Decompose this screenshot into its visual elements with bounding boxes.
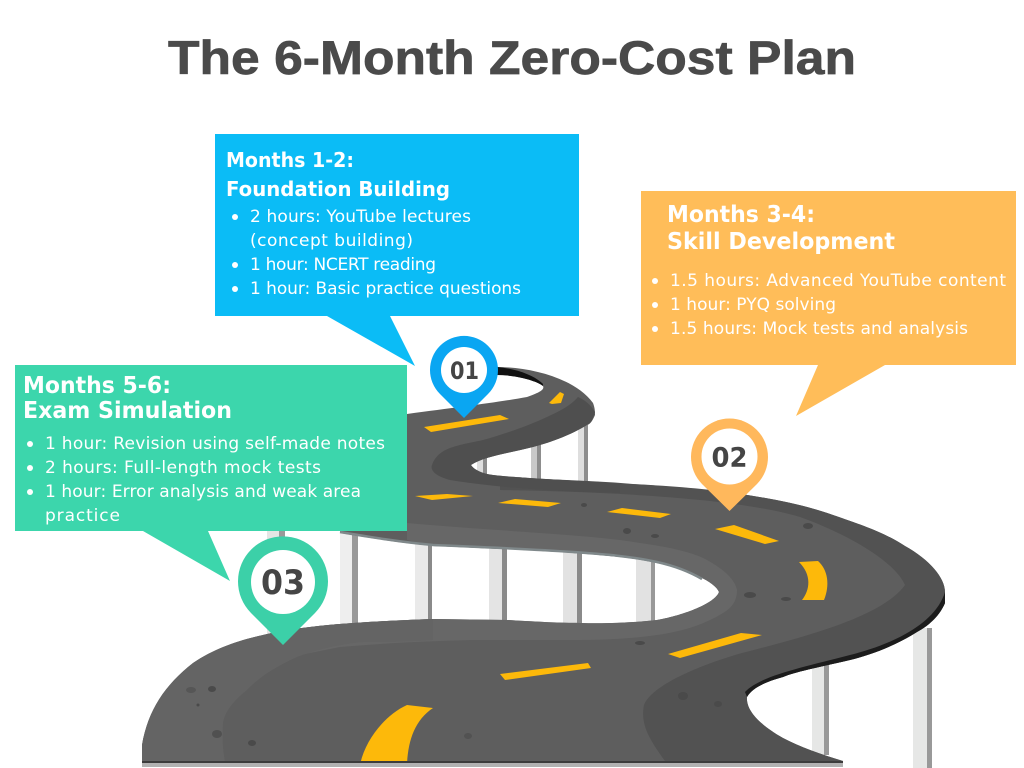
heading: Foundation Building	[226, 177, 450, 201]
road support pillars	[267, 425, 932, 768]
bottom road edge	[142, 761, 843, 763]
map pin 03	[238, 536, 328, 645]
bullet list: 1 hour: NCERT reading	[250, 255, 436, 275]
bullet list: 1 hour: PYQ solving	[670, 295, 836, 315]
heading: Exam Simulation	[23, 398, 232, 424]
bullet list	[652, 271, 1006, 339]
bullet list: 1 hour: Error analysis and weak area	[45, 482, 361, 502]
panel: months 3-4 skill development	[641, 191, 1016, 416]
road lighter shoulder lower left	[142, 619, 433, 762]
panel: months 5-6 exam simulation	[15, 365, 407, 581]
upper road shoulder	[432, 397, 620, 493]
bullet list: (concept building)	[250, 231, 413, 251]
yellow lane dashes	[360, 392, 827, 765]
panel: months 1-2 foundation building	[215, 134, 579, 366]
asphalt specks	[186, 503, 813, 746]
grey lip along the loop underside	[340, 532, 702, 579]
bullet list: practice	[45, 506, 120, 526]
bullet list: 1 hour: Basic practice questions	[250, 279, 521, 299]
callout box green	[15, 365, 407, 581]
bullet list: 1.5 hours: Mock tests and analysis	[670, 319, 968, 339]
callout box blue	[215, 134, 579, 366]
bullet list: 2 hours: YouTube lectures	[250, 207, 471, 227]
heading: Months 3-4:	[667, 202, 815, 228]
map pin 02	[691, 419, 768, 511]
map pin 03: 03	[261, 563, 305, 603]
heading: Skill Development	[667, 229, 895, 255]
bullet list	[232, 207, 521, 299]
bullet list	[27, 434, 385, 526]
winding road illustration	[142, 367, 945, 768]
title: The 6-Month Zero-Cost Plan	[168, 31, 856, 84]
heading: Months 5-6:	[23, 373, 171, 399]
heading: Months 1-2:	[226, 148, 354, 172]
road black edge right	[745, 592, 945, 697]
bullet list: 1.5 hours: Advanced YouTube content	[670, 271, 1006, 291]
black inner wall of upper road	[497, 367, 543, 386]
heading	[667, 202, 895, 255]
lighter band around the lower loop	[263, 523, 737, 655]
heading	[226, 148, 450, 201]
map pin 01: 01	[450, 357, 479, 385]
road darker shoulder outer right	[500, 477, 945, 761]
bullet list: 2 hours: Full-length mock tests	[45, 458, 321, 478]
map pin 02: 02	[712, 442, 748, 474]
callout box orange	[641, 191, 1016, 416]
main road surface	[142, 367, 945, 767]
map pin 01	[430, 336, 498, 418]
heading	[23, 373, 232, 424]
bullet list: 1 hour: Revision using self-made notes	[45, 434, 385, 454]
